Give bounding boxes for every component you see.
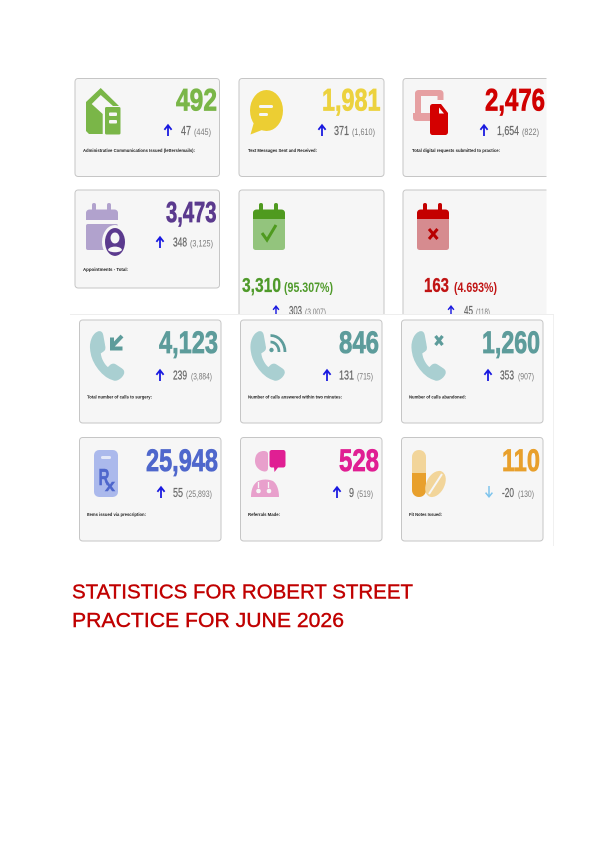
change: 55 (25,893) bbox=[173, 486, 212, 500]
icon: phone with incoming arrow bbox=[91, 332, 124, 380]
icon: up arrow bbox=[164, 125, 172, 136]
panel: appointments missed bbox=[403, 189, 550, 330]
value: 846: 846 bbox=[339, 324, 379, 360]
change: 45 (118): (118) bbox=[476, 307, 490, 318]
change: 303 (3,007): (3,007) bbox=[305, 307, 326, 318]
label: Total number of calls to surgery: bbox=[87, 394, 152, 400]
panel: referrals bbox=[240, 438, 382, 541]
icon: up arrow bbox=[156, 370, 164, 381]
title: STATISTICS FOR ROBERT STREET bbox=[72, 582, 413, 604]
icon: up arrow bbox=[448, 306, 454, 315]
value: 25,948: 25,948 bbox=[146, 442, 218, 478]
panel: appointments total bbox=[75, 190, 220, 288]
change: 371 (1,610): (1,610) bbox=[352, 127, 375, 138]
icon: request document bbox=[413, 90, 448, 135]
panel: appointments attended bbox=[239, 190, 384, 330]
change: 131 (715): (715) bbox=[357, 372, 373, 382]
label: Administrative Communications Issued (letters/emails): bbox=[83, 148, 195, 153]
change: 239 (3,884): (3,884) bbox=[191, 372, 212, 382]
value: 528: 528 bbox=[339, 442, 379, 478]
change: -20 (130): (130) bbox=[518, 489, 534, 500]
change: 45 (118): 45 bbox=[464, 304, 473, 318]
panel: calls answered bbox=[240, 320, 382, 423]
panel: lower image background bbox=[70, 314, 554, 547]
change: 353 (907) bbox=[500, 368, 534, 382]
value: 3,310 (95.307%): 3,310 bbox=[242, 275, 281, 297]
icon: up arrow bbox=[273, 306, 279, 315]
icon: up arrow bbox=[157, 487, 165, 498]
change: 131 (715) bbox=[339, 368, 373, 382]
value: 4,123: 4,123 bbox=[159, 324, 218, 360]
change: 47 (445): 47 bbox=[181, 124, 191, 138]
change: 353 (907): 353 bbox=[500, 368, 514, 382]
change: 1,654 (822): (822) bbox=[522, 127, 539, 138]
value: 1,981: 1,981 bbox=[322, 82, 380, 118]
icon: pills bbox=[412, 450, 450, 501]
icon: calendar with person bbox=[86, 203, 128, 259]
title bbox=[72, 582, 413, 632]
panel: administrative communications bbox=[75, 78, 220, 176]
change: 353 (907): (907) bbox=[518, 372, 534, 382]
icon: calendar with check bbox=[253, 203, 285, 250]
value: 3,473: 3,473 bbox=[166, 197, 216, 229]
label: Items issued via prescription: bbox=[87, 512, 146, 517]
icon: down arrow bbox=[486, 486, 492, 497]
change: 371 (1,610) bbox=[334, 124, 375, 138]
icon: house with document bbox=[86, 88, 120, 134]
change: 55 (25,893): (25,893) bbox=[186, 489, 212, 500]
panel: fit notes bbox=[402, 438, 543, 541]
change: 55 (25,893): 55 bbox=[173, 486, 183, 500]
icon: prescription clipboard: R bbox=[98, 464, 110, 490]
change: 371 (1,610): 371 bbox=[334, 124, 349, 138]
title: PRACTICE FOR JUNE 2026 bbox=[72, 610, 344, 632]
icon: up arrow bbox=[333, 487, 341, 498]
icon: speech bubble bbox=[250, 90, 283, 134]
change: 45 (118) bbox=[464, 304, 490, 318]
value: 3,310 (95.307%): (95.307%) bbox=[284, 280, 333, 295]
panel: text messages bbox=[239, 78, 384, 176]
change: 131 (715): 131 bbox=[339, 368, 354, 382]
label: Fit Notes Issued: bbox=[409, 512, 442, 517]
value: 492: 492 bbox=[176, 82, 217, 118]
label: Text Messages Sent and Received: bbox=[248, 148, 317, 153]
icon: up arrow bbox=[323, 370, 331, 381]
value: 3,310 (95.307%) bbox=[242, 275, 333, 297]
change: 1,654 (822): 1,654 bbox=[497, 124, 519, 138]
label: Total digital requests submitted to practice: bbox=[412, 148, 500, 153]
change: 239 (3,884) bbox=[173, 368, 212, 382]
value: 1,260: 1,260 bbox=[482, 324, 540, 360]
change: 47 (445): (445) bbox=[194, 127, 211, 138]
change: 9 (519): 9 bbox=[349, 486, 354, 500]
change: 239 (3,884): 239 bbox=[173, 368, 187, 382]
change: -20 (130) bbox=[502, 486, 534, 500]
icon: prescription clipboard: x bbox=[105, 476, 116, 495]
change: 9 (519): (519) bbox=[357, 489, 373, 500]
panel: prescription items bbox=[80, 438, 221, 541]
icon: phone with signal bbox=[251, 332, 285, 380]
icon: up arrow bbox=[480, 125, 488, 136]
change: 9 (519) bbox=[349, 486, 373, 500]
value: 2,476: 2,476 bbox=[485, 82, 545, 118]
icon: prescription clipboard bbox=[94, 450, 118, 497]
label: Number of calls abandoned: bbox=[409, 394, 466, 400]
icon: calendar with cross bbox=[417, 203, 449, 250]
icon: up arrow bbox=[156, 237, 164, 248]
panel: total calls bbox=[80, 320, 221, 423]
label: Appointments - Total: bbox=[83, 267, 128, 272]
value: 163 (4.693%): 163 bbox=[424, 275, 449, 297]
panel: calls abandoned bbox=[402, 320, 543, 423]
change: 348 (3,125) bbox=[173, 236, 213, 250]
value: 163 (4.693%) bbox=[424, 275, 497, 297]
icon: up arrow bbox=[318, 125, 326, 136]
panel: digital requests bbox=[403, 78, 550, 178]
change: 47 (445) bbox=[181, 124, 211, 138]
value: 110: 110 bbox=[502, 442, 540, 478]
change: -20 (130): -20 bbox=[502, 486, 514, 500]
value: 163 (4.693%): (4.693%) bbox=[454, 280, 497, 295]
change: 348 (3,125): 348 bbox=[173, 236, 187, 250]
icon: doctor with speech bubble bbox=[251, 450, 286, 497]
change: 303 (3,007) bbox=[289, 304, 326, 318]
label: Number of calls answered within two minutes: bbox=[248, 394, 342, 400]
change: 348 (3,125): (3,125) bbox=[190, 238, 213, 250]
icon: up arrow bbox=[484, 370, 492, 381]
label: Referrals Made: bbox=[248, 512, 280, 517]
change: 303 (3,007): 303 bbox=[289, 304, 302, 318]
icon: phone with cross bbox=[412, 332, 445, 380]
